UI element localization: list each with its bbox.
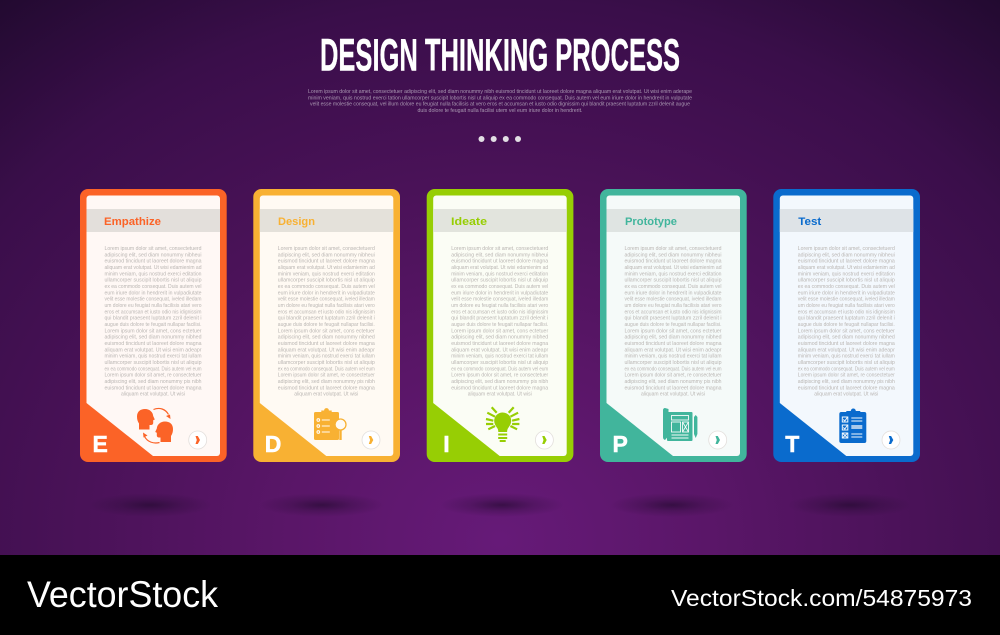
body text xyxy=(624,246,722,398)
subtitle text: Lorem ipsum dolor sit amet, consectetuer adipiscing elit, sed diam nonummy nibh euismod tincidunt ut laoreet dolore magna aliquam erat volutpat. Ut wisi enim aderape xyxy=(308,89,692,95)
body text: aliquam erat volutpat. Ut wisi edamienim ad xyxy=(451,265,548,271)
body text: aliquam erat volutpat. Ut wisi enim adeapr xyxy=(278,347,375,353)
body text: qui blandit praesent luptatum zzril delenit i xyxy=(451,316,548,322)
body text: augue duis dolore te feugait nullapar facilisi. xyxy=(451,322,548,328)
card: Prototype xyxy=(600,189,747,462)
body text: minim veniam, quis nostrud exerci tat iullam xyxy=(798,354,895,360)
body text: eum iriure dolor in hendrerit in vulpadiutate xyxy=(451,290,548,296)
body text: ullamcorper suscipit lobortis nisl ut aliquip xyxy=(624,278,722,284)
letter P: P xyxy=(612,431,628,457)
next button xyxy=(535,431,553,449)
heading: Prototype xyxy=(625,216,677,228)
body text: euismod tincidunt ut laoreet dolore magna xyxy=(104,385,202,391)
body text: um dolore eu feugiat nulla facilisis atari vero xyxy=(278,303,375,309)
body text: eros et accumsan et iusto odio nis idignissim xyxy=(104,309,202,315)
subtitle text: velit esse molestie consequat, vel illum dolore eu feugiat nulla facilisis at vero eros et accumsan et iusto odio dignissim qui blandit praesent luptatum zzril delenit augue xyxy=(310,102,690,108)
body text: Lorem ipsum dolor sit amet, re consectetuer xyxy=(798,373,895,379)
letter I: I xyxy=(443,431,450,457)
body text: eros et accumsan et iusto odio nis idignissim xyxy=(451,309,548,315)
body text: eum iriure dolor in hendrerit in vulpadiutate xyxy=(278,290,375,296)
body text: minim veniam, quis nostrud exerci editation xyxy=(451,271,548,277)
header band xyxy=(86,209,220,232)
body text: minim veniam, quis nostrud exerci tat iullam xyxy=(104,354,202,360)
header band xyxy=(780,209,913,232)
body text: Lorem ipsum dolor sit amet, re consectetuer xyxy=(104,373,202,379)
body text: Lorem ipsum dolor sit amet, cons ectetuer xyxy=(104,328,202,334)
body text: um dolore eu feugiat nulla facilisis atari vero xyxy=(624,303,722,309)
body text: aliquam erat volutpat. Ut wisi enim adeapr xyxy=(451,347,548,353)
body text: augue duis dolore te feugait nullapar facilisi. xyxy=(624,322,722,328)
body text: minim veniam, quis nostrud exerci editation xyxy=(278,271,375,277)
card frame xyxy=(773,189,920,462)
card frame xyxy=(427,189,573,462)
body text: ex ea commodo consequat. Duis autem vel eum xyxy=(104,366,202,372)
icon: blueprint and pencil xyxy=(663,408,697,441)
body text: ex ea commodo consequat. Duis autem vel eum xyxy=(451,366,548,372)
body text: um dolore eu feugiat nulla facilisis atari vero xyxy=(798,303,895,309)
body text: ex ea commodo consequat. Duis autem vel eum xyxy=(278,366,375,372)
body text: adipiscing elit, sed diam nonummy pis nibh xyxy=(451,379,548,385)
body text: ullamcorper suscipit lobortis nisl ut aliquip xyxy=(278,360,375,366)
body text: adipiscing elit, sed diam nonummy nibhed xyxy=(624,335,722,341)
body text: minim veniam, quis nostrud exerci tat iullam xyxy=(451,354,548,360)
footer logo: VectorStock xyxy=(27,574,218,615)
body text: adipiscing elit, sed diam nonummy nibheui xyxy=(624,252,722,258)
next button xyxy=(362,431,380,449)
body text: augue duis dolore te feugait nullapar facilisi. xyxy=(278,322,375,328)
body text: euismod tincidunt ut laoreet dolore magna xyxy=(798,259,895,265)
body text: ullamcorper suscipit lobortis nisl ut aliquip xyxy=(798,278,895,284)
body text: euismod tincidunt ut laoreet dolore magna xyxy=(104,259,202,265)
body text: velit esse molestie consequat, iveled illedam xyxy=(451,297,548,303)
body text: velit esse molestie consequat, iveled illedam xyxy=(278,297,375,303)
inner panel xyxy=(780,196,913,456)
card shadows xyxy=(88,493,912,517)
body text: aliquam erat volutpat. Ut wisi xyxy=(641,392,705,398)
body text: ullamcorper suscipit lobortis nisl ut aliquip xyxy=(798,360,895,366)
body text: euismod tincidunt ut laoreet dolore magna xyxy=(278,385,375,391)
body text: velit esse molestie consequat, iveled illedam xyxy=(624,297,722,303)
heading: Empathize xyxy=(104,216,161,228)
body text: qui blandit praesent luptatum zzril delenit i xyxy=(798,316,895,322)
heading: Design xyxy=(278,216,315,228)
body text: ex ea commodo consequat. Duis autem vel eum xyxy=(798,366,895,372)
body text: ullamcorper suscipit lobortis nisl ut aliquip xyxy=(104,360,202,366)
body text: adipiscing elit, sed diam nonummy nibhed xyxy=(104,335,202,341)
body text: Lorem ipsum dolor sit amet, consectetuerd xyxy=(278,246,375,252)
icon: test checklist clipboard xyxy=(839,409,866,443)
subtitle text: minim veniam, quis nostrud exerci tation ullamcorper suscipit lobortis nisl ut aliquip ex ea commodo consequat. Duis autem vel eum iriure dolor in hendrerit in vulputate xyxy=(308,95,692,101)
header band xyxy=(260,209,393,232)
next button xyxy=(189,431,207,449)
body text xyxy=(104,246,202,398)
letter E: E xyxy=(92,431,108,457)
body text: ullamcorper suscipit lobortis nisl ut aliquip xyxy=(624,360,722,366)
body text: ex ea commodo consequat. Duis autem vel xyxy=(451,284,548,290)
letter T: T xyxy=(785,431,799,457)
header band xyxy=(433,209,567,232)
icon: two heads with arrows xyxy=(137,408,173,443)
body text: euismod tincidunt ut laoreet dolore magna xyxy=(624,341,722,347)
body text: velit esse molestie consequat, iveled illedam xyxy=(104,297,202,303)
body text: aliquam erat volutpat. Ut wisi enim adeapr xyxy=(798,347,895,353)
body text: ex ea commodo consequat. Duis autem vel xyxy=(104,284,202,290)
header band xyxy=(606,209,740,232)
body text: aliquam erat volutpat. Ut wisi edamienim ad xyxy=(798,265,895,271)
footer image id: VectorStock.com/54875973 xyxy=(671,585,972,611)
next button xyxy=(882,431,900,449)
body text: eum iriure dolor in hendrerit in vulpadiutate xyxy=(624,290,722,296)
body text: eros et accumsan et iusto odio nis idignissim xyxy=(798,309,895,315)
title: DESIGN THINKING PROCESS xyxy=(320,30,680,80)
card: Ideate xyxy=(427,189,573,462)
body text: adipiscing elit, sed diam nonummy nibheui xyxy=(798,252,895,258)
body text: ex ea commodo consequat. Duis autem vel xyxy=(624,284,722,290)
inner panel xyxy=(86,196,220,456)
body text: euismod tincidunt ut laoreet dolore magna xyxy=(278,259,375,265)
card: Design xyxy=(253,189,400,462)
letter D: D xyxy=(265,431,281,457)
inner panel xyxy=(606,196,740,456)
body text: um dolore eu feugiat nulla facilisis atari vero xyxy=(104,303,202,309)
body text: Lorem ipsum dolor sit amet, cons ectetuer xyxy=(451,328,548,334)
body text: Lorem ipsum dolor sit amet, consectetuerd xyxy=(798,246,895,252)
body text: euismod tincidunt ut laoreet dolore magna xyxy=(451,259,548,265)
body text: minim veniam, quis nostrud exerci editation xyxy=(798,271,895,277)
body text: qui blandit praesent luptatum zzril delenit i xyxy=(278,316,375,322)
body text: adipiscing elit, sed diam nonummy pis nibh xyxy=(104,379,202,385)
body text: qui blandit praesent luptatum zzril delenit i xyxy=(104,316,202,322)
body text: aliquam erat volutpat. Ut wisi enim adeapr xyxy=(104,347,202,353)
body text: adipiscing elit, sed diam nonummy pis nibh xyxy=(278,379,375,385)
body text: Lorem ipsum dolor sit amet, cons ectetuer xyxy=(798,328,895,334)
card frame xyxy=(600,189,747,462)
body text: ex ea commodo consequat. Duis autem vel xyxy=(798,284,895,290)
body text: adipiscing elit, sed diam nonummy nibheui xyxy=(104,252,202,258)
body text: aliquam erat volutpat. Ut wisi xyxy=(814,392,878,398)
body text: adipiscing elit, sed diam nonummy nibhed xyxy=(451,335,548,341)
body text: ullamcorper suscipit lobortis nisl ut aliquip xyxy=(451,278,548,284)
body text: minim veniam, quis nostrud exerci editation xyxy=(624,271,722,277)
body text: euismod tincidunt ut laoreet dolore magna xyxy=(798,385,895,391)
body text: adipiscing elit, sed diam nonummy pis nibh xyxy=(798,379,895,385)
body text: aliquam erat volutpat. Ut wisi edamienim ad xyxy=(104,265,202,271)
body text: Lorem ipsum dolor sit amet, consectetuerd xyxy=(624,246,722,252)
body text: ullamcorper suscipit lobortis nisl ut aliquip xyxy=(451,360,548,366)
body text: euismod tincidunt ut laoreet dolore magna xyxy=(104,341,202,347)
footer band xyxy=(0,555,1000,635)
next button xyxy=(709,431,727,449)
card: Empathize xyxy=(80,189,227,462)
subtitle text xyxy=(308,89,692,114)
body text: Lorem ipsum dolor sit amet, consectetuerd xyxy=(451,246,548,252)
body text: Lorem ipsum dolor sit amet, cons ectetuer xyxy=(278,328,375,334)
body text: eum iriure dolor in hendrerit in vulpadiutate xyxy=(104,290,202,296)
body text: Lorem ipsum dolor sit amet, re consectetuer xyxy=(624,373,722,379)
body text: aliquam erat volutpat. Ut wisi edamienim ad xyxy=(624,265,722,271)
body text: qui blandit praesent luptatum zzril delenit i xyxy=(624,316,722,322)
card frame xyxy=(253,189,400,462)
body text: adipiscing elit, sed diam nonummy nibhed xyxy=(798,335,895,341)
inner panel xyxy=(260,196,393,456)
body text xyxy=(278,246,375,398)
body text: ullamcorper suscipit lobortis nisl ut aliquip xyxy=(104,278,202,284)
body text: ex ea commodo consequat. Duis autem vel eum xyxy=(624,366,722,372)
body text: Lorem ipsum dolor sit amet, consectetuerd xyxy=(104,246,202,252)
body text: aliquam erat volutpat. Ut wisi xyxy=(294,392,358,398)
body text xyxy=(451,246,548,398)
body text: ullamcorper suscipit lobortis nisl ut aliquip xyxy=(278,278,375,284)
body text: eum iriure dolor in hendrerit in vulpadiutate xyxy=(798,290,895,296)
body text: ex ea commodo consequat. Duis autem vel xyxy=(278,284,375,290)
body text: euismod tincidunt ut laoreet dolore magna xyxy=(798,341,895,347)
inner panel xyxy=(433,196,567,456)
body text: aliquam erat volutpat. Ut wisi xyxy=(468,392,532,398)
body text: aliquam erat volutpat. Ut wisi edamienim ad xyxy=(278,265,375,271)
icon: light bulb xyxy=(486,407,519,441)
body text: euismod tincidunt ut laoreet dolore magna xyxy=(451,341,548,347)
body text: eros et accumsan et iusto odio nis idignissim xyxy=(278,309,375,315)
body text: Lorem ipsum dolor sit amet, re consectetuer xyxy=(451,373,548,379)
body text: minim veniam, quis nostrud exerci tat iullam xyxy=(624,354,722,360)
icon: clipboard with magnifier xyxy=(314,408,346,440)
body text: adipiscing elit, sed diam nonummy nibheui xyxy=(451,252,548,258)
subtitle text: duis dolore te feugait nulla facilisi utem vel eum iriure dolor in hendrerit. xyxy=(418,108,582,114)
body text: euismod tincidunt ut laoreet dolore magna xyxy=(624,385,722,391)
heading: Ideate xyxy=(451,216,487,228)
body text: augue duis dolore te feugait nullapar facilisi. xyxy=(104,322,202,328)
heading: Test xyxy=(798,216,822,228)
card frame xyxy=(80,189,227,462)
body text: minim veniam, quis nostrud exerci tat iullam xyxy=(278,354,375,360)
body text: aliquam erat volutpat. Ut wisi xyxy=(121,392,185,398)
body text: adipiscing elit, sed diam nonummy pis nibh xyxy=(624,379,722,385)
body text: euismod tincidunt ut laoreet dolore magna xyxy=(278,341,375,347)
body text: adipiscing elit, sed diam nonummy nibheui xyxy=(278,252,375,258)
body text: Lorem ipsum dolor sit amet, re consectetuer xyxy=(278,373,375,379)
body text: um dolore eu feugiat nulla facilisis atari vero xyxy=(451,303,548,309)
body text: adipiscing elit, sed diam nonummy nibhed xyxy=(278,335,375,341)
body text: euismod tincidunt ut laoreet dolore magna xyxy=(451,385,548,391)
body text: augue duis dolore te feugait nullapar facilisi. xyxy=(798,322,895,328)
body text: velit esse molestie consequat, iveled illedam xyxy=(798,297,895,303)
pagination dots xyxy=(478,136,521,142)
body text: aliquam erat volutpat. Ut wisi enim adeapr xyxy=(624,347,722,353)
body text: euismod tincidunt ut laoreet dolore magna xyxy=(624,259,722,265)
body text: eros et accumsan et iusto odio nis idignissim xyxy=(624,309,722,315)
body text: minim veniam, quis nostrud exerci editation xyxy=(104,271,202,277)
card: Test xyxy=(773,189,920,462)
body text xyxy=(798,246,895,398)
body text: Lorem ipsum dolor sit amet, cons ectetuer xyxy=(624,328,722,334)
